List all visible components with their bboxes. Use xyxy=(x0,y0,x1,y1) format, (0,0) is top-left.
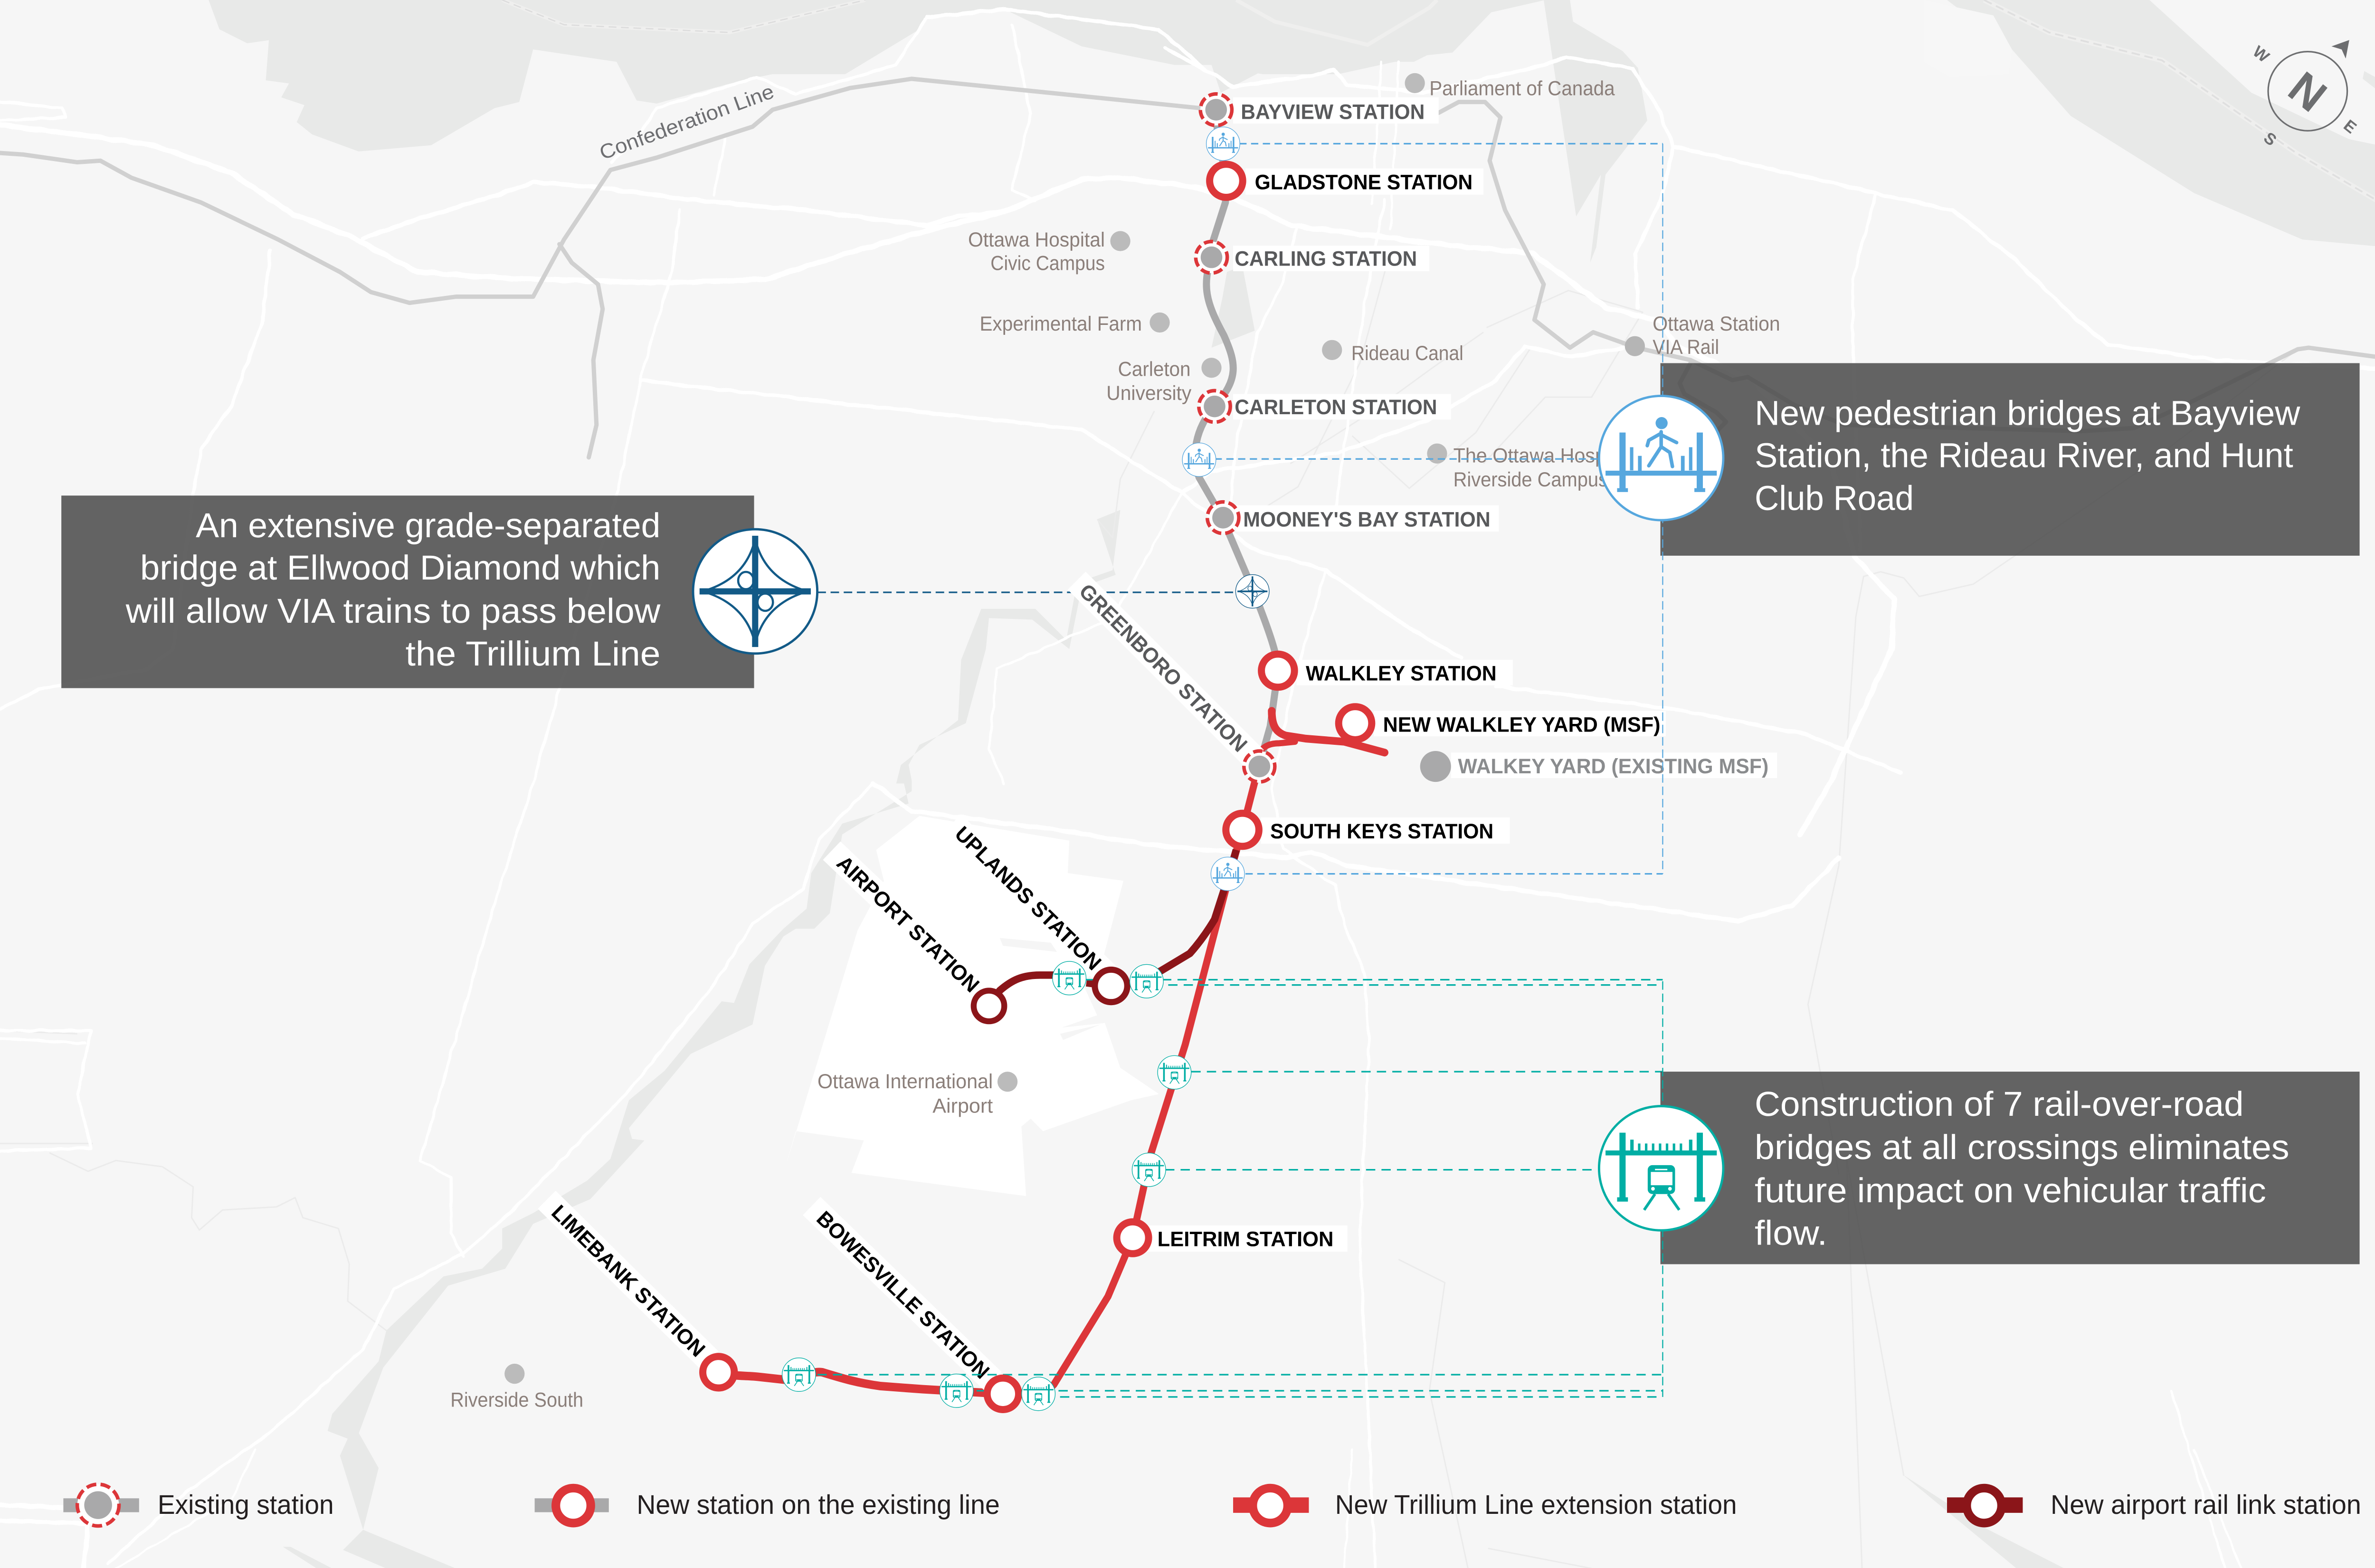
label: Mooney's Bay Station: MOONEY'S BAY STATION xyxy=(1243,508,1491,531)
panel: pedestrian bridges callout: Club Road xyxy=(1755,479,1914,518)
point of interest: Ottawa International Airport xyxy=(817,1070,1017,1117)
legend: existing station: Existing station xyxy=(158,1489,334,1520)
legend: new station on the existing line xyxy=(535,1488,1000,1523)
icon: pedestrian bridge at Bayview xyxy=(1206,127,1240,161)
station: Greenboro (existing) xyxy=(1244,751,1275,782)
panel: pedestrian bridges callout xyxy=(1661,363,2360,556)
icon: rail-over-road bridge C xyxy=(1158,1055,1191,1089)
connector: vertical pedestrian bridge trunk xyxy=(1662,144,1663,874)
station: Airport (airport link) xyxy=(974,991,1004,1021)
label: Walkley Station: WALKLEY STATION xyxy=(1306,662,1497,685)
point of interest: Ottawa Hospital Civic Campus: Civic Campus xyxy=(990,251,1105,275)
connectors: rail-over-road bridge leaders xyxy=(817,980,1662,1397)
label: Carling Station: CARLING STATION xyxy=(1235,247,1417,270)
marker: Walkey Yard existing xyxy=(1420,751,1451,782)
label: Walkey Yard (Existing MSF): WALKEY YARD (EXISTING MSF) xyxy=(1458,755,1768,778)
icon: rail-over-road bridge G xyxy=(1022,1377,1055,1411)
station: Mooney's Bay (existing) xyxy=(1207,502,1239,533)
station: Carleton (existing) xyxy=(1199,390,1230,422)
icon: rail-over-road bridge B xyxy=(1130,964,1163,998)
legend: existing station xyxy=(63,1484,334,1526)
panel: pedestrian bridges callout: Station, the Rideau River, and Hunt xyxy=(1755,436,2294,475)
panel: Ellwood Diamond callout: will allow VIA trains to pass below xyxy=(124,592,662,630)
point of interest: Ottawa Hospital Civic Campus xyxy=(968,228,1130,275)
point of interest: Riverside South: Riverside South xyxy=(450,1388,583,1411)
point of interest: Ottawa Station VIA Rail: VIA Rail xyxy=(1653,335,1719,359)
point of interest: Ottawa Station VIA Rail xyxy=(1625,312,1780,359)
map: airport runway tint xyxy=(1000,938,1100,1040)
point of interest: Ottawa Station VIA Rail: Ottawa Station xyxy=(1653,312,1780,335)
point of interest: Experimental Farm: Experimental Farm xyxy=(980,312,1142,335)
legend: new Trillium Line extension station xyxy=(1233,1488,1737,1523)
icon: Ellwood Diamond large xyxy=(693,529,817,654)
compass: N xyxy=(2279,64,2335,122)
label: Confederation Line: Confederation Line xyxy=(596,80,777,164)
point of interest: Ottawa International Airport: Airport xyxy=(932,1094,993,1117)
label: New Walkley Yard (MSF): NEW WALKLEY YARD (MSF) xyxy=(1383,713,1661,736)
panel: rail-over-road bridges callout: bridges at all crossings eliminates xyxy=(1755,1128,2290,1167)
station: Gladstone (new) xyxy=(1210,164,1243,197)
icon: rail-over-road bridge E xyxy=(782,1358,816,1391)
station: Walkley (new) xyxy=(1262,654,1294,687)
label: Airport Station (rotated): AIRPORT STATION xyxy=(832,851,984,997)
icon: pedestrian bridge at Rideau River xyxy=(1182,443,1216,476)
legend: new airport rail link station xyxy=(1947,1488,2361,1523)
point of interest: The Ottawa Hospital Riverside Campus xyxy=(1427,444,1631,491)
point of interest: Ottawa International Airport: Ottawa International xyxy=(817,1070,993,1093)
label: Leitrim Station: LEITRIM STATION xyxy=(1158,1228,1334,1251)
icon: rail-over-road bridge A xyxy=(1053,961,1086,995)
station: Leitrim (extension) xyxy=(1117,1222,1149,1254)
label: Carleton Station: CARLETON STATION xyxy=(1235,396,1437,419)
compass: E xyxy=(2339,116,2360,138)
label: Greenboro Station (rotated): GREENBORO STATION xyxy=(1074,580,1252,757)
legend: new Trillium Line extension station: New Trillium Line extension station xyxy=(1335,1489,1737,1520)
connectors: pedestrian bridge leaders xyxy=(1215,144,1662,874)
map: river channel line xyxy=(502,0,2375,215)
station: New Walkley Yard xyxy=(1339,707,1372,740)
point of interest: Carleton University: Carleton xyxy=(1118,357,1191,380)
icon: rail-over-road bridge F xyxy=(940,1374,973,1407)
line: existing Trillium Line (grey) xyxy=(1195,110,1278,765)
station: South Keys (new) xyxy=(1226,813,1259,846)
connector: vertical rail bridge trunk xyxy=(1662,981,1663,1397)
station: Bowesville (extension) xyxy=(987,1378,1019,1410)
point of interest: Parliament of Canada: Parliament of Canada xyxy=(1429,76,1616,100)
panel: rail-over-road bridges callout: flow. xyxy=(1755,1214,1827,1253)
label: Gladstone Station: GLADSTONE STATION xyxy=(1255,171,1472,194)
label: Uplands Station (rotated): UPLANDS STATION xyxy=(950,822,1106,975)
panel: rail-over-road bridges callout: Construction of 7 rail-over-road xyxy=(1755,1085,2244,1123)
map: land patch xyxy=(1924,0,2012,77)
icon: pedestrian bridge at Hunt Club xyxy=(1211,857,1244,891)
station: Bayview (existing) xyxy=(1200,94,1232,125)
panel: rail-over-road bridges callout xyxy=(1661,1072,2360,1264)
point of interest: Rideau Canal: Rideau Canal xyxy=(1351,342,1463,365)
label: Limebank Station (rotated): LIMEBANK STATION xyxy=(547,1201,710,1361)
compass: S xyxy=(2260,129,2280,150)
legend: new station on the existing line: New station on the existing line xyxy=(636,1489,1000,1520)
point of interest: Riverside South xyxy=(450,1364,583,1411)
panel: Ellwood Diamond callout: An extensive grade-separated xyxy=(196,506,660,545)
icon: Ellwood Diamond marker xyxy=(1235,575,1269,608)
label: Bayview Station: BAYVIEW STATION xyxy=(1241,100,1425,124)
compass: W xyxy=(2249,43,2272,67)
station: Uplands (airport link) xyxy=(1095,969,1127,1002)
label: Bowesville Station (rotated): BOWESVILLE STATION xyxy=(812,1207,994,1383)
point of interest: The Ottawa Hospital Riverside Campus: The Ottawa Hospital xyxy=(1454,444,1631,467)
point of interest: Carleton University: University xyxy=(1106,381,1192,405)
icon: pedestrian bridge large xyxy=(1599,396,1723,520)
connector: Ellwood Diamond bridge leader xyxy=(817,592,1236,593)
compass xyxy=(2249,40,2360,150)
panel: Ellwood Diamond callout: the Trillium Line xyxy=(406,635,660,673)
map: airport lands xyxy=(785,816,1159,1196)
station: Limebank (extension) xyxy=(703,1357,734,1388)
label: South Keys Station: SOUTH KEYS STATION xyxy=(1270,820,1493,843)
point of interest: Carleton University xyxy=(1106,357,1222,405)
panel: pedestrian bridges callout: New pedestrian bridges at Bayview xyxy=(1755,394,2301,433)
point of interest: Rideau Canal xyxy=(1322,340,1463,365)
icon: rail-over-road bridge large xyxy=(1599,1106,1723,1230)
station: Carling (existing) xyxy=(1196,241,1227,273)
panel: rail-over-road bridges callout: future impact on vehicular traffic xyxy=(1755,1171,2266,1210)
line: Trillium Line extension (red) xyxy=(719,711,1385,1394)
rail: Confederation Line and branches xyxy=(0,79,2375,457)
point of interest: Ottawa Hospital Civic Campus: Ottawa Hospital xyxy=(968,228,1105,251)
panel: Ellwood Diamond callout: bridge at Ellwood Diamond which xyxy=(140,549,660,587)
icon: rail-over-road bridge D xyxy=(1132,1153,1166,1187)
line: airport rail link (dark red) xyxy=(989,850,1236,1006)
legend: new airport rail link station: New airport rail link station xyxy=(2051,1489,2361,1520)
panel: Ellwood Diamond callout xyxy=(61,495,754,688)
point of interest: The Ottawa Hospital Riverside Campus: Riverside Campus xyxy=(1454,468,1608,491)
